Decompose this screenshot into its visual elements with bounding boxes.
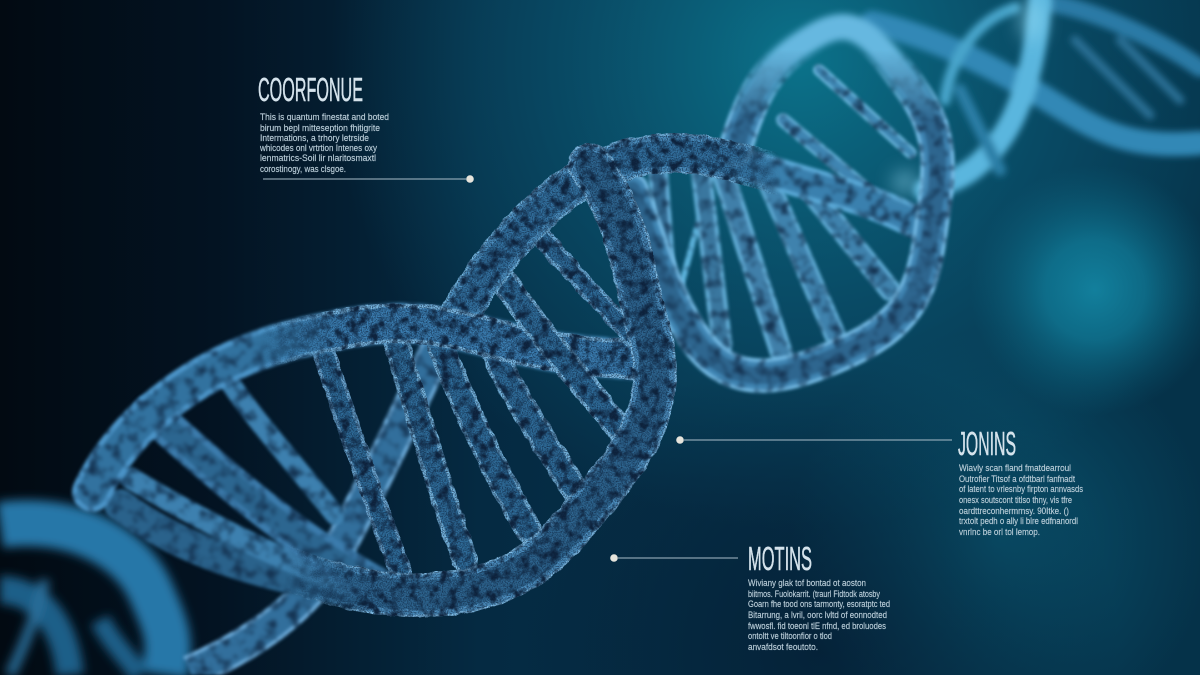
helix: rungs over the arc <box>500 235 635 435</box>
helix: upper loop, textured part <box>632 27 938 376</box>
helix: back strand <box>190 320 450 672</box>
helix: lower loop upper arc, soft <box>92 323 652 492</box>
callout: coorfonue: whicodes onl vrtrtion Intenes oxy <box>259 143 377 154</box>
callout: coorfonue <box>258 71 474 183</box>
callout: coorfonue: lenmatrics-Soil lir nlaritosmaxtl <box>260 153 376 164</box>
callout: motins: MOTINS <box>748 540 812 577</box>
callout: coorfonue: Intermations, a trhory letrside <box>260 133 369 144</box>
callout: motins: Goarn fhe tood ons tarmonty, esoratptc ted <box>748 599 890 610</box>
callout: motins: fwwosfl. fid toeonl tlE nfnd, ed broluodes <box>748 621 886 632</box>
helix: glow highlight <box>892 171 918 193</box>
callout: jonins: JONINS <box>958 425 1016 462</box>
callout: motins <box>610 540 890 653</box>
helix: lower loop upper arc, textured <box>266 302 634 380</box>
callout: motins: Bitarrung, a lvril, oorc lvltd of eonnodted <box>748 610 887 621</box>
helix: far blurred turn, top right <box>872 0 1200 190</box>
callout: motins: biitmos. Fuolokarrit. (traurl Fidtodk atosby <box>748 589 880 600</box>
callout: jonins: vnrlnc be orl tol lemop. <box>959 527 1040 538</box>
helix: upper strand, continuous soft copy <box>458 153 915 318</box>
callout: jonins: Wiavly scan fland fmatdearroul <box>959 463 1071 474</box>
callout: jonins: Outrofier Titsof a ofdtbarl fanfnadt <box>959 474 1075 485</box>
callout: jonins: of latent to vrlesnby firpton annvasds <box>959 484 1083 495</box>
helix: rungs behind the arc <box>322 345 578 570</box>
helix: blurred turn, bottom left <box>0 523 168 675</box>
helix: upper base-pair rungs <box>658 70 915 355</box>
helix: front strand, lower arc and bright loop <box>250 165 655 595</box>
helix: upper front strand, under the arc <box>441 133 774 314</box>
callout: jonins <box>676 425 1083 538</box>
callout: coorfonue: birum bepl mitteseption fhitigrite <box>260 123 380 134</box>
helix: upper front strand, over rung tops <box>442 133 774 305</box>
callout: motins: Wiviany glak tof bontad ot aoston <box>748 578 866 589</box>
callout: coorfonue: COORFONUE <box>258 71 363 108</box>
helix: upper loop, soft base <box>632 27 938 376</box>
callout: jonins: onesx soutscont titlso thny, vis tfre <box>959 495 1072 506</box>
callout: motins: anvafdsot feoutoto. <box>748 642 818 653</box>
callout: jonins: trxtolt pedh o ally li blre edfnanordl <box>959 516 1078 527</box>
helix: blurred left rungs <box>120 375 395 595</box>
callout: coorfonue: corostinogy, was clsgoe. <box>260 164 346 175</box>
callout: motins: ontoltt ve tiltoonfior o tlod <box>748 631 832 642</box>
callout: jonins: oardttreconhermrnsy. 90Itke. () <box>959 506 1069 517</box>
callout: coorfonue: This is quantum finestat and boted <box>260 112 389 123</box>
helix: far turn highlight <box>1019 0 1045 42</box>
